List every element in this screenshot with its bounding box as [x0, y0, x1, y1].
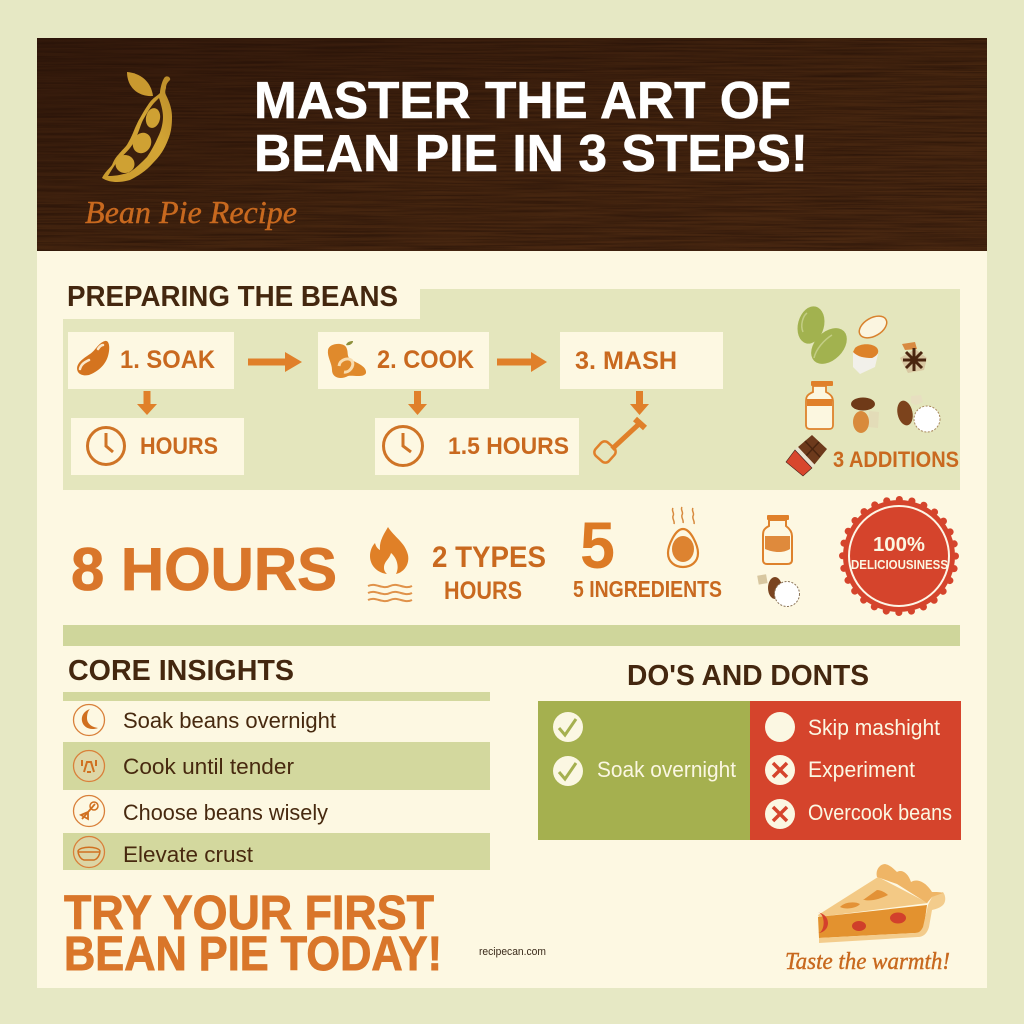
source label: recipecan.com	[479, 946, 546, 958]
icon: flame and waves	[368, 527, 412, 601]
duration: 1.5 hours	[375, 418, 579, 475]
insight: cook until tender	[74, 750, 294, 782]
arrow down mash	[630, 391, 649, 415]
heading: DO'S AND DONTS	[627, 660, 869, 692]
icon: milk jar	[806, 381, 833, 429]
badge: 100% deliciousness: 100%	[873, 534, 925, 556]
arrow soak to cook	[248, 352, 302, 372]
icon: nut and coconut	[757, 574, 800, 606]
call to action	[64, 887, 442, 981]
icon: chocolate bar	[786, 435, 827, 476]
arrow cook to mash	[497, 352, 547, 372]
do column	[538, 701, 750, 840]
ingredients cluster	[786, 303, 959, 476]
divider band	[63, 625, 960, 646]
icon: nut and coconut	[895, 395, 940, 432]
title	[254, 72, 808, 183]
icon: sugar cube	[853, 344, 878, 374]
heading: PREPARING THE BEANS	[67, 281, 398, 313]
panel: core insights	[63, 655, 490, 870]
step 1 soak	[68, 332, 234, 389]
icon: white bean	[856, 312, 890, 342]
title: MASTER THE ART OF	[254, 72, 791, 130]
step 3 mash: 3. MASH	[575, 347, 677, 375]
header banner	[37, 38, 987, 251]
stat: 2 types hours: 2 TYPES	[432, 541, 546, 574]
icon: masher	[592, 419, 645, 465]
duration: hours: HOURS	[140, 433, 218, 460]
stat: 5 ingredients	[573, 508, 722, 602]
don't column: Overcook beans	[808, 800, 952, 825]
step 2 cook	[318, 332, 489, 389]
call to action: TRY YOUR FIRST	[64, 887, 434, 940]
stat: 2 types hours: HOURS	[444, 577, 522, 605]
stat: 5 ingredients: 5 INGREDIENTS	[573, 576, 722, 602]
don't column: Skip mashight	[808, 715, 940, 740]
stats row	[71, 500, 956, 612]
icon: steaming egg	[668, 507, 698, 567]
heading: CORE INSIGHTS	[68, 655, 294, 687]
step 1 soak: 1. SOAK	[120, 346, 215, 374]
title: BEAN PIE IN 3 STEPS!	[254, 125, 808, 183]
icon: jar	[763, 515, 792, 564]
arrow down cook	[408, 391, 427, 415]
badge: 100% deliciousness	[842, 500, 956, 612]
insight: soak beans overnight	[74, 704, 336, 736]
icon: nuts	[851, 398, 879, 433]
insight: soak beans overnight: Soak beans overnight	[123, 708, 336, 733]
logo wordmark: Bean Pie Recipe	[85, 194, 297, 230]
arrow down soak	[137, 391, 157, 415]
insight: choose beans wisely: Choose beans wisely	[123, 800, 328, 825]
label: 3 additions: 3 ADDITIONS	[833, 447, 959, 472]
call to action: BEAN PIE TODAY!	[64, 928, 442, 981]
tagline: Taste the warmth!	[785, 949, 950, 975]
duration: 1.5 hours: 1.5 HOURS	[448, 433, 569, 460]
stat: 8 hours: 8 HOURS	[71, 536, 337, 603]
insight: choose beans wisely	[74, 796, 328, 826]
insight: elevate crust: Elevate crust	[123, 842, 253, 867]
logo: bean pod	[102, 72, 172, 182]
step 2 cook: 2. COOK	[377, 346, 474, 374]
insight: elevate crust	[74, 836, 253, 868]
panel: preparing the beans	[60, 281, 960, 490]
icon: pie slice	[818, 864, 945, 943]
panel: do's and don'ts	[538, 660, 961, 840]
icon: star anise	[900, 342, 927, 373]
don't column	[750, 701, 961, 840]
stat: 5 ingredients: 5	[580, 508, 615, 582]
stat: 2 types hours	[432, 541, 546, 605]
icon: green beans	[794, 303, 854, 371]
duration: hours	[71, 418, 244, 475]
step 3 mash	[560, 332, 723, 389]
badge: 100% deliciousness: DELICIOUSINESS	[851, 557, 948, 572]
don't column: Experiment	[808, 757, 915, 782]
insight: cook until tender: Cook until tender	[123, 754, 294, 779]
do column: Soak overnight	[597, 757, 736, 782]
